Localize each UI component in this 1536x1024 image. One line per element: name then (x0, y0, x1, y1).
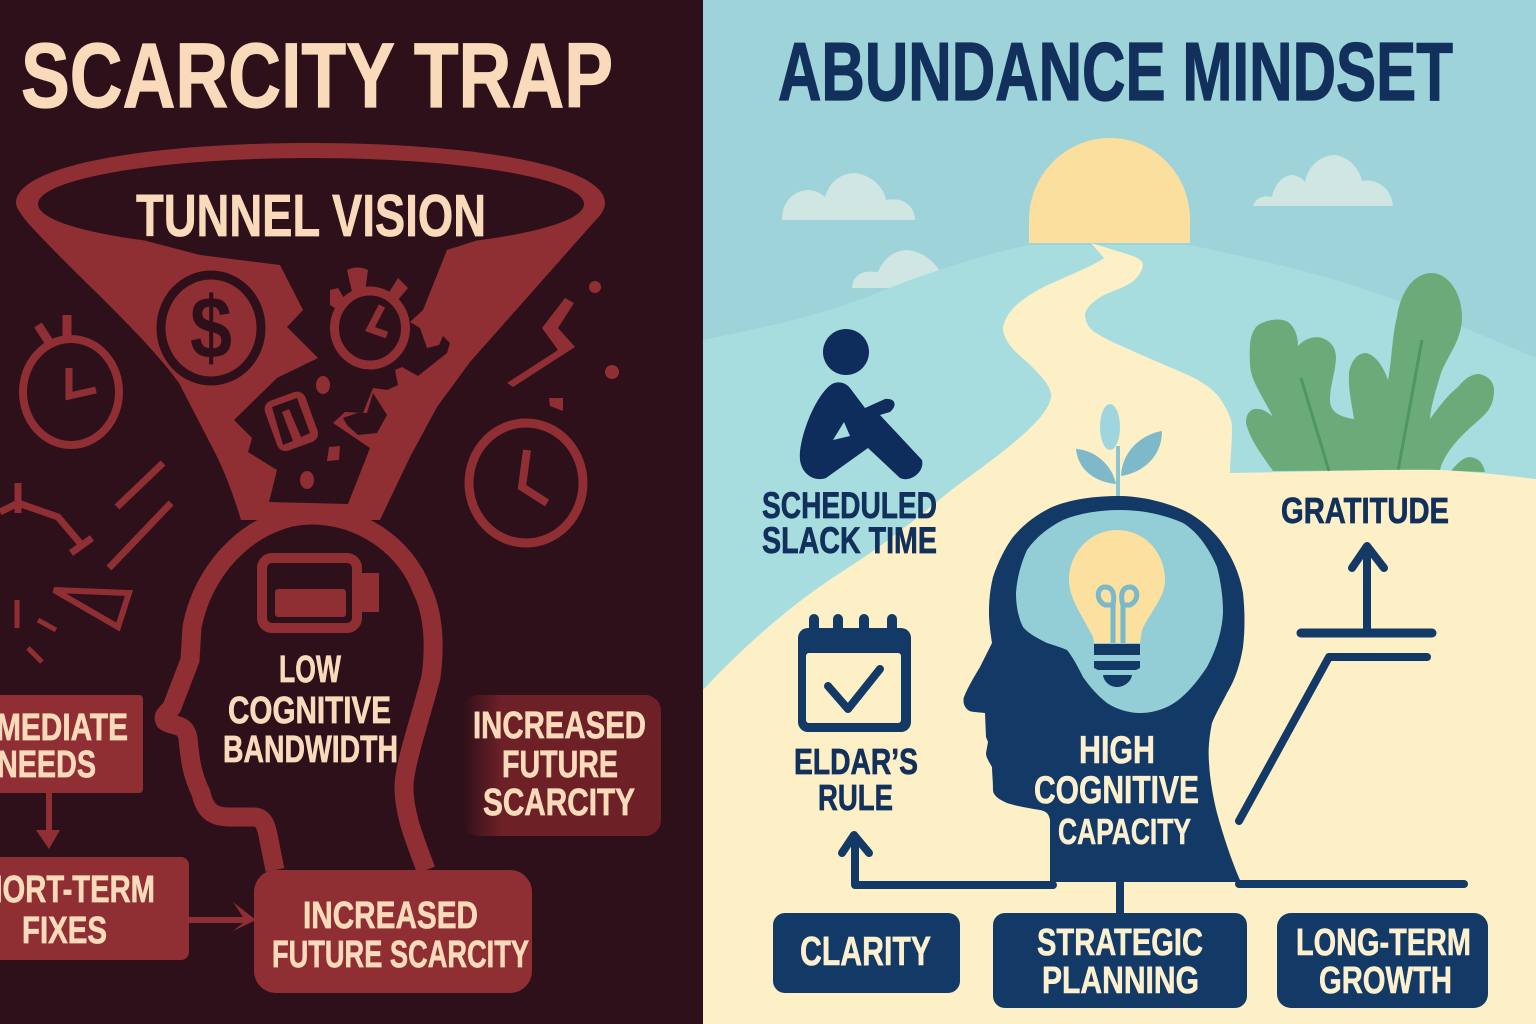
arrow: to eldar's rule (842, 835, 1053, 885)
label: scheduled slack time: SLACK TIME (762, 520, 937, 561)
icon: stopwatch in funnel (330, 268, 408, 365)
arrow: to gratitude (1301, 546, 1432, 633)
box: increased future scarcity, faded: FUTURE (502, 744, 618, 786)
connectors under head (1120, 883, 1464, 913)
panel: scarcity trap (0, 0, 704, 1024)
icon: dollar coin (161, 275, 261, 381)
head label: high cognitive capacity: COGNITIVE (1034, 769, 1199, 812)
box: strategic planning: PLANNING (1042, 960, 1199, 1002)
icon: lightning bolt (507, 298, 575, 387)
box: immediate needs (0, 695, 143, 793)
falling debris (300, 376, 387, 489)
box: clarity (773, 913, 960, 993)
box: short-term fixes: FIXES (22, 910, 107, 952)
label: eldar's rule: RULE (818, 777, 893, 818)
box: long-term growth: GROWTH (1319, 960, 1452, 1002)
box: clarity: CLARITY (800, 928, 931, 974)
arrow: fixes to scarcity (189, 902, 256, 931)
sprout (1076, 404, 1162, 496)
box: increased future scarcity, faded: INCREASED (473, 705, 646, 747)
head outline (164, 515, 433, 870)
scattered marks (0, 281, 619, 662)
background hill (703, 245, 1536, 1024)
box: increased future scarcity, faded: SCARCITY (483, 782, 635, 824)
box: increased future scarcity: INCREASED (303, 895, 478, 937)
ground and road (703, 243, 1536, 1024)
label: eldar's rule: ELDAR’S (794, 741, 918, 782)
clouds (782, 155, 1393, 288)
head silhouette (963, 496, 1244, 882)
icon: left clock (23, 315, 119, 445)
head label: high cognitive capacity: HIGH (1079, 729, 1155, 772)
box: short-term fixes (0, 857, 189, 960)
icon: right clock (469, 423, 583, 543)
icon: low battery (262, 558, 379, 628)
funnel label: TUNNEL VISION (136, 183, 486, 249)
box: long-term growth (1277, 913, 1488, 1008)
box: increased future scarcity (254, 870, 532, 993)
head label: low cognitive bandwidth: LOW (279, 649, 341, 691)
brain area (1016, 510, 1223, 713)
box: increased future scarcity: FUTURE SCARCITY (272, 934, 529, 976)
arrow: needs to fixes (36, 793, 60, 849)
icon: dollar coin: $ (190, 278, 232, 377)
label: eldar's rule (794, 741, 918, 818)
box: increased future scarcity, faded (462, 695, 661, 836)
box: strategic planning (993, 913, 1247, 1008)
icon: light bulb (1069, 530, 1165, 687)
head label: low cognitive bandwidth: BANDWIDTH (223, 729, 398, 771)
plant (1246, 273, 1494, 472)
icon: calendar (798, 619, 911, 732)
head label: low cognitive bandwidth: COGNITIVE (228, 690, 391, 732)
head label: high cognitive capacity (1034, 729, 1199, 852)
rising line (1239, 657, 1427, 821)
box: strategic planning: STRATEGIC (1037, 922, 1203, 964)
funnel (16, 143, 605, 520)
label: gratitude: GRATITUDE (1281, 490, 1449, 531)
icon: coin tag (262, 389, 321, 454)
label: scheduled slack time: SCHEDULED (762, 485, 937, 526)
head label: low cognitive bandwidth (223, 649, 398, 771)
label: scheduled slack time (762, 485, 937, 561)
sun (1029, 138, 1190, 243)
box: immediate needs: NEEDS (0, 744, 96, 786)
head label: high cognitive capacity: CAPACITY (1058, 811, 1191, 852)
box: long-term growth: LONG-TERM (1296, 922, 1471, 964)
title: scarcity trap: SCARCITY TRAP (21, 25, 613, 127)
panel: abundance mindset (703, 0, 1536, 1024)
icon: seated person (800, 329, 922, 479)
